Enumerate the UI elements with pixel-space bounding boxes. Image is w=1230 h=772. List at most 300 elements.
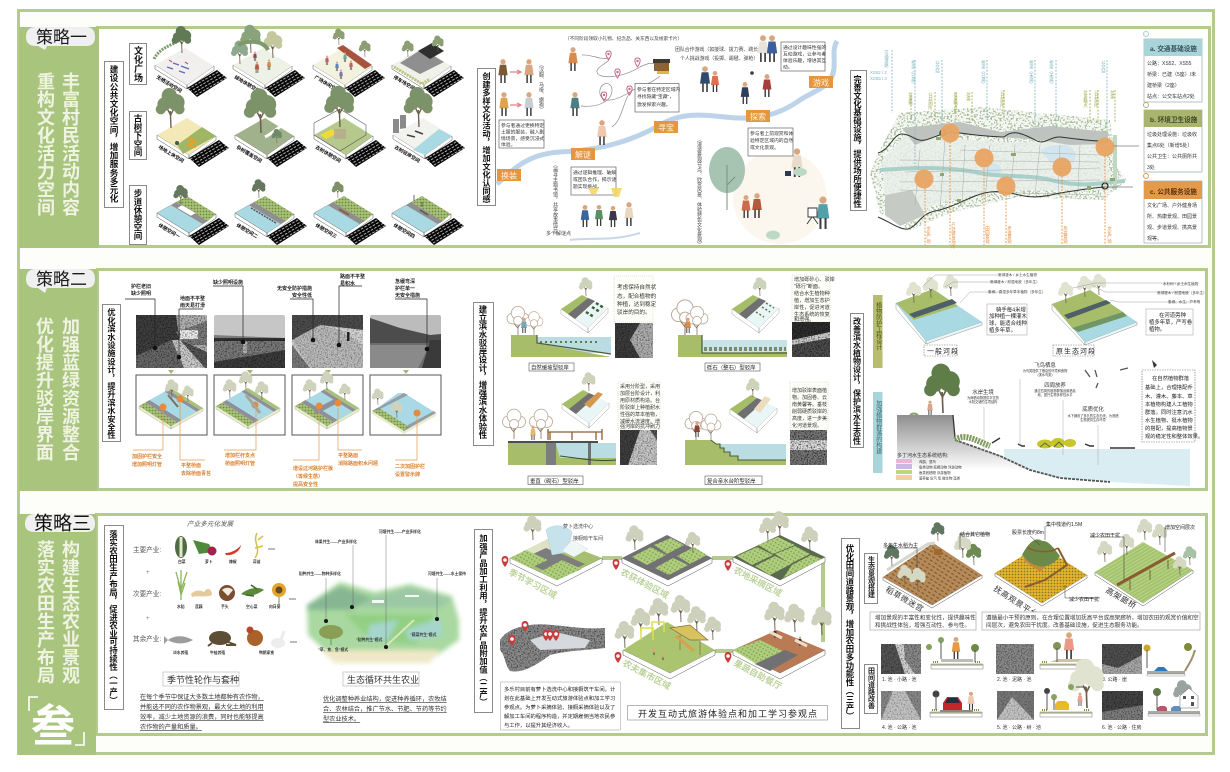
text box: games: 通过设计趣味性强的 [783, 44, 826, 51]
labels: waterside ecology: 水下铺设了多孔的生态石块，为底栖 [1068, 413, 1119, 418]
problem labels: 缺少照明 [131, 290, 151, 297]
map: infrastructure plan: XS55 / 3 [870, 76, 887, 81]
card c: public services: 文化广场、户外健身场 [1147, 202, 1197, 209]
text box: interactive tourism [500, 682, 620, 730]
heading: field roads [842, 538, 860, 728]
text box: compound steps: 削弱硬质驳岸的 [792, 408, 827, 415]
cross section: waterside ecology [897, 360, 1190, 488]
text box: interactive tourism: 参观点。为萝卜采摘体验、接橱采摘体验以及了 [504, 703, 615, 711]
labels: processing plant: 接橱晾干车间 [573, 535, 603, 542]
map: infrastructure plan: 桥梁（未建） [1049, 59, 1054, 86]
sidebar: strategy one: 策略一 [36, 28, 87, 47]
panel: strategy one [19, 25, 1210, 250]
landscape: circular agriculture: "稻鸭共生"模式 [356, 637, 383, 642]
text box: puzzle: 题实现挑战。 [573, 183, 602, 190]
text box: natural slope: 态，配合植物的 [617, 292, 657, 300]
text box: exploration: 验特定区域内的自然 [750, 137, 793, 144]
photo 2: bridge [214, 315, 285, 368]
text box: general section: 加种植一棵灌木 [989, 312, 1027, 320]
isometric cell: row 3 col 4: 休憩空间四 [392, 222, 416, 240]
card a: transport [1144, 32, 1202, 102]
tag: costume change [497, 169, 521, 181]
illustration: game players [700, 35, 777, 104]
text box: plant community: 水生植物、挺水植物 [1145, 416, 1193, 424]
text: crop rotation: 农作物的产量和质量。 [140, 723, 202, 731]
card b: sanitation: 垃圾处理设施：垃圾收 [1147, 131, 1197, 138]
photo 3: unpaved road [292, 315, 363, 368]
heading: plant design [850, 314, 864, 448]
text box: costume activity: 土服的服装，融入剧 [501, 128, 544, 136]
labels: maze: 结合其它植物 [960, 531, 990, 538]
row: secondary industries: 次要产业: [133, 589, 161, 598]
map: infrastructure plan: 热高景观 [1063, 225, 1068, 245]
card c: public services: 所、热康景观、田园景 [1147, 213, 1197, 220]
map: infrastructure plan: 公共厕所 [928, 92, 934, 111]
label: eco landscape: 生态景观搭建 [868, 555, 875, 599]
labels: waterside ecology: 水岸生境 [972, 388, 994, 396]
label: old tree space: 古树下空间 [133, 113, 143, 157]
map: infrastructure plan: 田园景观 [985, 226, 990, 245]
card c: public services: 观等。 [1147, 235, 1162, 242]
text box: vertical [618, 382, 660, 430]
map: infrastructure plan: 户外健身场所 [951, 221, 956, 250]
card a: transport: 公路：XS52、XS55 [1147, 60, 1192, 67]
text box: costume activity [499, 120, 544, 148]
text box: exploration: 或文化景观。 [750, 144, 779, 151]
label: old tree space [130, 112, 146, 160]
labels: maze: 稻草微迷宫 [884, 584, 926, 614]
text box: treasure hunt [635, 84, 680, 112]
revetment: vertical [502, 372, 616, 465]
isometric cell: row 2 col 1 [156, 88, 229, 167]
heading: farmland layout: 落实农田生产布局，促进农业可持续性（一产） [108, 529, 118, 704]
label: circular agriculture: 生态循环共生农业 [347, 674, 419, 685]
note labels: general section: 常绿灌木 / 耐湿地被（多年生） [990, 279, 1040, 284]
illustration: seated puzzle group [570, 188, 640, 240]
problem labels: 无安全防护措施 [277, 285, 312, 292]
heading: plant design: 改善滨水植物设计，保护滨水生态性 [852, 316, 862, 445]
labels: flower platform: 股票长度约8m [1012, 529, 1044, 536]
row: other industries: 鸭鹅家禽 [259, 650, 274, 655]
card b: sanitation: 公共卫生：公共厕所共 [1147, 153, 1197, 160]
text box: puzzle [571, 167, 616, 195]
caption: games: 个人挑战游戏（投掷、踢毽、弹枪） [680, 55, 758, 62]
isometric cell: row 3 col 1: 休憩空间一 [157, 222, 181, 240]
sidebar: strategy three: 策略三 [34, 512, 91, 534]
labels: waterside ecology: 通过四周的植物群落设置栖息 [1034, 388, 1076, 393]
isometric cell: row 1 col 4 [392, 36, 464, 97]
label: general section: 一般河段 [927, 346, 959, 356]
text box: games: 互动游戏，让参与者 [783, 50, 826, 58]
text box: general section: 球，能适合线种 [989, 319, 1027, 327]
card c: public services: 观、步道景观、携高景 [1147, 224, 1197, 231]
text box: vertical: 用原材质构造。台 [620, 397, 660, 404]
iso: flower viewing platform [995, 539, 1087, 606]
text box: costume activity: 参与者通过更换特定 [501, 122, 544, 129]
row: secondary industries: 空心菜 [246, 604, 258, 609]
isometric cell: row 3 col 2 [235, 179, 307, 245]
row: main industries [133, 533, 275, 564]
photo: compound steps [790, 430, 827, 465]
label: vertical: 垂直（砌石）型驳岸 [530, 477, 579, 485]
text box: general section [987, 304, 1027, 335]
sidebar: strategy two: 策略二 [36, 270, 87, 289]
row: other industries: 牛蛙养殖 [210, 650, 225, 655]
side label: plant community: 加强植物群落的构建 [875, 399, 882, 455]
text box: compound steps: 增加驳岸表面植 [792, 387, 827, 394]
caption: treasure items: （不同阶段领取小礼物、纪念品、关东西以及线索卡片） [565, 35, 682, 42]
text box: gravel: "砾行"断面、 [794, 283, 823, 290]
note: puzzle: （遍寻主题书馆，共享故事情节） [552, 162, 558, 237]
road type 3: 3. 公路 · 崖 [1102, 676, 1127, 683]
heading: infrastructure [850, 70, 866, 210]
text box: puzzle: 通过逻辑推理、破解 [573, 169, 616, 176]
map: infrastructure plan: 文化广场 [1107, 225, 1112, 245]
text box: vertical: 加层台阶设计，利 [620, 390, 660, 397]
title: industry diversity: 产业多元化发展 [187, 520, 235, 528]
isometric cell: row 1 col 1: 无栖活动空间 [155, 74, 183, 95]
row: main industries: 白菜 [178, 559, 186, 564]
note labels: ecological section: 常绿灌木 / 耐湿地被（多年生） [1157, 290, 1207, 295]
sidebar: strategy three: 落实农田生产布局 [35, 540, 55, 684]
card c: public services [1144, 174, 1202, 243]
tag: treasure hunt: 寻宝 [658, 122, 674, 132]
heading: diverse cultural activities: 创建多样文化活动，增加文化认同感 [482, 71, 491, 203]
note labels: ecological section: 垂柳、水生、芦苇等 [1168, 299, 1201, 304]
isometric cell: row 2 col 1: 场地上休空间 [157, 144, 185, 165]
row: other industries [133, 626, 297, 655]
label: eco landscape [864, 554, 878, 604]
revetment: natural slope [507, 277, 611, 357]
heading: public cultural space [104, 62, 124, 208]
text box: interactive tourism: 多乐村目前有萝卜选洗中心和接橱筑干车间。计 [504, 685, 616, 693]
map: infrastructure plan: 垃圾箱点 [1083, 89, 1088, 109]
text box: platform and walkway: 间层次，避免农田干扰度。改善基础设施，促进生态服务功能。 [986, 621, 1143, 629]
landscape: circular agriculture: 河塘共生——水土保持 [428, 571, 466, 576]
illustration: exploration scene [709, 147, 829, 244]
text box: costume activity: 情场景，感受沉浸式 [501, 135, 544, 142]
map: infrastructure plan: 桥梁（未建） [1029, 59, 1034, 86]
card b: sanitation: b. 环境卫生设施 [1150, 115, 1198, 124]
legend: water ecology structure: 鸬鹚、鹭鸟 [919, 459, 937, 464]
photo: natural slope [615, 323, 653, 358]
improvement labels: 消除路面积水问题 [338, 460, 378, 467]
map: infrastructure plan: 桥梁（已建） [911, 59, 916, 86]
text box: platform and walkway: 遵循最小干预的原则，在合理位置增加抚高平台或高架廊桥，增加农田的观赏价值和空 [986, 614, 1199, 622]
connector route [602, 558, 823, 651]
labels: waterside ecology: 飞鸟栖息 [1034, 361, 1056, 369]
text box: interactive tourism: 与工作，以提升其经济收入。 [504, 721, 573, 729]
tag: costume change: 换装 [501, 170, 517, 180]
tag: puzzle solving [571, 148, 595, 160]
render box 3 [292, 371, 363, 435]
orange leaders [133, 403, 417, 460]
road type 2: 2. 池 · 泥路 · 池 [997, 676, 1031, 683]
row: main industries: 主要产业: [133, 545, 161, 554]
text box: gravel: 结合水生植物种 [794, 290, 830, 297]
heading: farmland layout [104, 526, 124, 710]
isometric cell: row 1 col 2: 绿地休憩空间 [233, 74, 261, 95]
labels: waterside ecology: （滨水鸟类） [1035, 372, 1055, 377]
landscape: circular agriculture: "草、禽、鱼"模式 [318, 647, 348, 652]
isometric cell: row 2 col 4 [393, 87, 465, 167]
map: infrastructure plan: 公共厕所 [1094, 90, 1100, 109]
map: village locations [500, 621, 605, 671]
isometric cell: row 1 col 2 [231, 25, 305, 97]
text box: puzzle: 或团队合作，揭示谜 [573, 176, 616, 183]
label: vertical [528, 476, 583, 485]
map: infrastructure plan: 公交站 [935, 60, 940, 75]
revetment: gravel [672, 277, 787, 357]
problem labels: 安全性低 [292, 292, 312, 299]
side label: plant community [873, 392, 882, 473]
sidebar: strategy two: 加强蓝绿资源整合 [60, 317, 80, 461]
text box: ecological section: 植多年草，严写卷 [1149, 318, 1193, 326]
text box: natural slope: 种植，达到稳定 [617, 300, 657, 308]
text box: exploration: 参与者上前观赏和体 [750, 130, 793, 137]
problem labels [131, 273, 420, 309]
note labels: ecological section [1157, 281, 1207, 304]
tag: game: 游戏 [813, 78, 829, 88]
label: ecological section [1053, 345, 1096, 356]
banner: tourism points: 开发互动式旅游体验点和加工学习参观点 [638, 708, 818, 719]
photo 1: old railing path [136, 315, 207, 368]
label: crop rotation: 季节性轮作与套种 [167, 674, 239, 685]
isometric cell: row 2 col 2 [235, 88, 307, 167]
road type 6 [1102, 680, 1200, 731]
heading: field roads: 优化田间道路景观，增加农田多功能性（三产） [845, 543, 855, 720]
tag: game [809, 76, 833, 88]
label: crop rotation [163, 672, 239, 686]
road type 6: 6. 池 · 公路 · 住房 [1102, 724, 1141, 731]
caption: games: 团队合作游戏（如接球、拔力赛、跳长绳） [675, 46, 768, 53]
road type 4: 4. 池 · 公路 · 池 [882, 724, 916, 731]
illustration: treasure hunt trail [568, 47, 670, 145]
improvement labels: 二次加固护栏 [395, 463, 425, 470]
platform: self-service restaurant [725, 602, 832, 679]
text box: vertical: 减缓水流速度。增 [620, 418, 660, 425]
improvement labels: 加固护栏安全 [132, 453, 162, 460]
heading: diverse cultural activities [478, 68, 496, 206]
label: footpath rest space [130, 186, 146, 244]
text box: compound steps: 高度，进一步美 [792, 415, 827, 422]
text box: maze [870, 612, 976, 630]
labels: flower platform [992, 521, 1100, 619]
sidebar: strategy three [18, 512, 96, 755]
text box: plant community: 木、灌木、藤本、草 [1145, 392, 1193, 400]
text box: treasure hunt: 寻找隐藏"宝藏"， [637, 93, 674, 100]
improvement labels: 去除桥面青苔 [181, 470, 211, 477]
card b: sanitation: 集点6处（新增5处） [1147, 142, 1193, 149]
label: cultural square [130, 44, 146, 84]
text box: ecological section [1146, 309, 1193, 335]
label: field road improvement [864, 664, 878, 714]
tag: treasure hunt [654, 121, 678, 133]
text box: ecological section: 植物。 [1149, 325, 1165, 333]
side label: plant protection [873, 295, 882, 368]
row: main industries: 蒜苗 [253, 559, 261, 564]
label: ecological section: 原生态河段 [1056, 346, 1096, 356]
sidebar: strategy two: 优化提升驳岸界面 [34, 317, 54, 461]
row: main industries: 辣椒 [229, 559, 237, 564]
text box: gravel: 和增强。 [794, 316, 814, 323]
map: infrastructure plan: 垃圾 [966, 91, 972, 102]
labels: processing plant: 萝卜选洗中心 [563, 523, 593, 530]
text: circular agriculture: 合、农林结合，推广节水、节肥、节药等节约 [323, 705, 447, 713]
row: secondary industries: 水稻 [177, 604, 185, 609]
text box: plant community: 在自然植物群落 [1152, 374, 1190, 382]
black annotation leaders [125, 286, 429, 359]
isometric cell: row 3 col 2: 休憩空间二 [235, 222, 259, 240]
river route [497, 41, 837, 184]
label: gravel: 砾石（整石）型驳岸 [707, 364, 756, 372]
photo: gravel [792, 322, 830, 357]
text box: natural slope [614, 276, 657, 322]
side label: plant protection: 植物防护工程设计 [875, 301, 882, 351]
labels: waterside ecology: 底质优化 [1082, 405, 1104, 413]
text box: ecological section: 在河道旁种 [1159, 311, 1187, 319]
sidebar: strategy three: 叁 [31, 702, 75, 751]
text box: gravel [792, 275, 835, 323]
label: natural slope: 自然缓坡型驳岸 [531, 364, 569, 372]
map: infrastructure plan: 交通道路 [884, 49, 890, 69]
road type 3 [1102, 643, 1195, 683]
legend: water ecology structure: 多丁河水生态系统结构: [897, 452, 948, 459]
heading: processing [474, 530, 492, 712]
improvement labels: 桥面照明灯管 [225, 460, 255, 467]
heading: riverbank design: 建立滨水驳岸设计，增强滨水体验性 [478, 304, 488, 439]
text box: platform and walkway [982, 612, 1200, 630]
text box: vertical: 性强的草本植物， [620, 411, 660, 418]
render box 2 [214, 371, 285, 435]
labels: waterside ecology: 为鸟类提供了栖息的环境和食物 [1023, 368, 1068, 373]
road type 2 [996, 632, 1092, 683]
heading: waterfront facilities [102, 304, 120, 442]
revetment: compound steps [685, 378, 786, 465]
panel: strategy three [18, 511, 1206, 755]
labels: walkway: 高架廊桥 [1104, 585, 1138, 611]
problem labels: 无安全措施 [395, 292, 420, 299]
card b: sanitation: 3处 [1147, 164, 1155, 171]
tag: puzzle solving: 解谜 [575, 150, 591, 160]
labels: flower platform: 集中栈道约1.5M [1046, 521, 1082, 528]
note: costume: （汉服、马褂、旗袍） [538, 62, 544, 112]
note: exploration: （漫游景观节点、欣赏风景、体验特色文化景观） [696, 137, 702, 247]
label: cultural square: 文化广场 [133, 45, 143, 83]
text box: compound steps: 南黄馨等。垂枝 [792, 401, 827, 408]
map: infrastructure plan [870, 49, 1139, 250]
row: secondary industries: 向日葵 [269, 604, 281, 609]
labels: maze: 多年生水稻为主 [883, 542, 918, 549]
text: restaurant: 果蔬自助餐厅 [732, 657, 784, 692]
row: other industries: 其余产业: [133, 634, 161, 643]
road type 4 [881, 690, 982, 731]
text box: gravel: 植，增加生态护 [794, 297, 830, 304]
row: secondary industries [133, 570, 296, 609]
map: infrastructure plan: 垃圾箱点 [953, 91, 958, 111]
labels: walkway: 增加空间层次 [1165, 524, 1195, 531]
landscape: circular agriculture: 稻鸭共生——物种多样化 [299, 571, 341, 576]
card c: public services: c. 公共服务设施 [1150, 187, 1197, 196]
card b: sanitation [1144, 102, 1202, 172]
map: infrastructure plan: 文化广场 [926, 225, 932, 245]
label: compound steps: 复合亲水台阶型驳岸 [707, 477, 756, 485]
text box: plant community: 观的稳定性和整体效果。 [1145, 432, 1203, 440]
tag: exploration: 探索 [750, 112, 766, 122]
text box: treasure hunt: 激发探索兴趣。 [637, 101, 671, 108]
improvement labels: 增加栏杆支点 [225, 452, 255, 459]
label: footpath rest space: 步道休憩空间 [133, 188, 143, 241]
improvement labels [132, 452, 425, 488]
text: crop rotation: 效率，减少土地资源的浪费，同时也能够提高 [140, 713, 264, 721]
problem labels: 易积水 [340, 280, 355, 287]
isometric cell: row 2 col 3 [314, 86, 386, 167]
landscape: circular agriculture: "蔬菜共生"模式 [410, 632, 437, 637]
landscape: circular agriculture: 河塘共生——产业多样化 [379, 529, 421, 534]
text box: gravel: 生态系统的恢复 [794, 311, 830, 318]
heading: riverbank design [474, 302, 494, 446]
illustration: costume figures [498, 59, 534, 116]
legend: water ecology structure [896, 452, 962, 480]
note labels: general section: 常绿灌木 / 乡土水生植物 [998, 272, 1037, 277]
text box: exploration [748, 128, 793, 156]
heading: waterfront facilities: 优化滨水设施设计，提升滨水安全性 [106, 307, 116, 439]
problem labels: 缺少照明设施 [213, 279, 243, 286]
platform: farm picking [725, 511, 825, 586]
sidebar: strategy one [19, 27, 99, 248]
improvement labels: 增加照明灯管 [132, 461, 162, 468]
photo: vertical [620, 430, 657, 465]
note lines: ecological section [1073, 283, 1190, 302]
labels: waterside ecology: 生物提供生存环境 [1080, 417, 1107, 422]
text box: vertical: 采用分阶型，采用 [620, 383, 660, 390]
labels: walkway [1090, 524, 1195, 611]
card a: transport: 桥梁：已建（5座）/未 [1147, 71, 1196, 78]
heading: public cultural space: 建设公共文化空间，增加服务多元化 [109, 64, 119, 204]
text box: gravel: 岸性，促进河道 [794, 304, 830, 311]
text: harvest experience: 农获体验区域 [619, 566, 671, 601]
heading: processing: 加强产品加工利用，提升农产品附加值（二产） [478, 533, 488, 706]
improvement labels: （等候生態） [293, 473, 323, 480]
platform: harvest experience [613, 525, 712, 586]
problem labels: 路面不平整 [340, 273, 365, 280]
text box: compound steps: 化河道景观。 [792, 422, 822, 429]
map: infrastructure plan: XS52 / 2 [870, 70, 887, 75]
labels: flower platform: 抚高观景平台 [992, 583, 1040, 619]
text: circular agriculture: 型农业技术。 [323, 715, 360, 723]
isometric cell: row 2 col 2: 杂树覆盖空间 [235, 144, 263, 165]
row: secondary industries: 芋头 [221, 604, 229, 609]
platform: seasonal learning [502, 515, 602, 586]
label: general section [924, 345, 959, 356]
text: seasonal learning: 季节学习区域 [507, 566, 559, 601]
note lines: general section [922, 275, 1000, 303]
text: farm picking: 农地采摘区域 [732, 564, 784, 599]
labels: maze [883, 531, 990, 614]
improvement labels: 平整路面 [338, 452, 358, 459]
render box 4 [370, 375, 441, 435]
sidebar: strategy one: 丰富村民活动内容 [60, 72, 80, 216]
text box: plant community [1142, 370, 1203, 442]
text: farmer market: 农夫集市区域 [621, 657, 673, 692]
text box: games: 动。 [783, 64, 793, 70]
map: infrastructure plan: 垃圾桶 [908, 91, 914, 107]
iso: elevated walkway [1095, 519, 1196, 606]
label: gravel [705, 363, 760, 372]
text: crop rotation: 在每个季节中保证大多数土地都种有农作物， [140, 693, 264, 701]
labels: waterside ecology: 为两栖动物提供丰富的 [967, 395, 999, 400]
legend: water ecology structure: 营养盐 氮气 氧 微生物 藻类 [919, 476, 961, 480]
